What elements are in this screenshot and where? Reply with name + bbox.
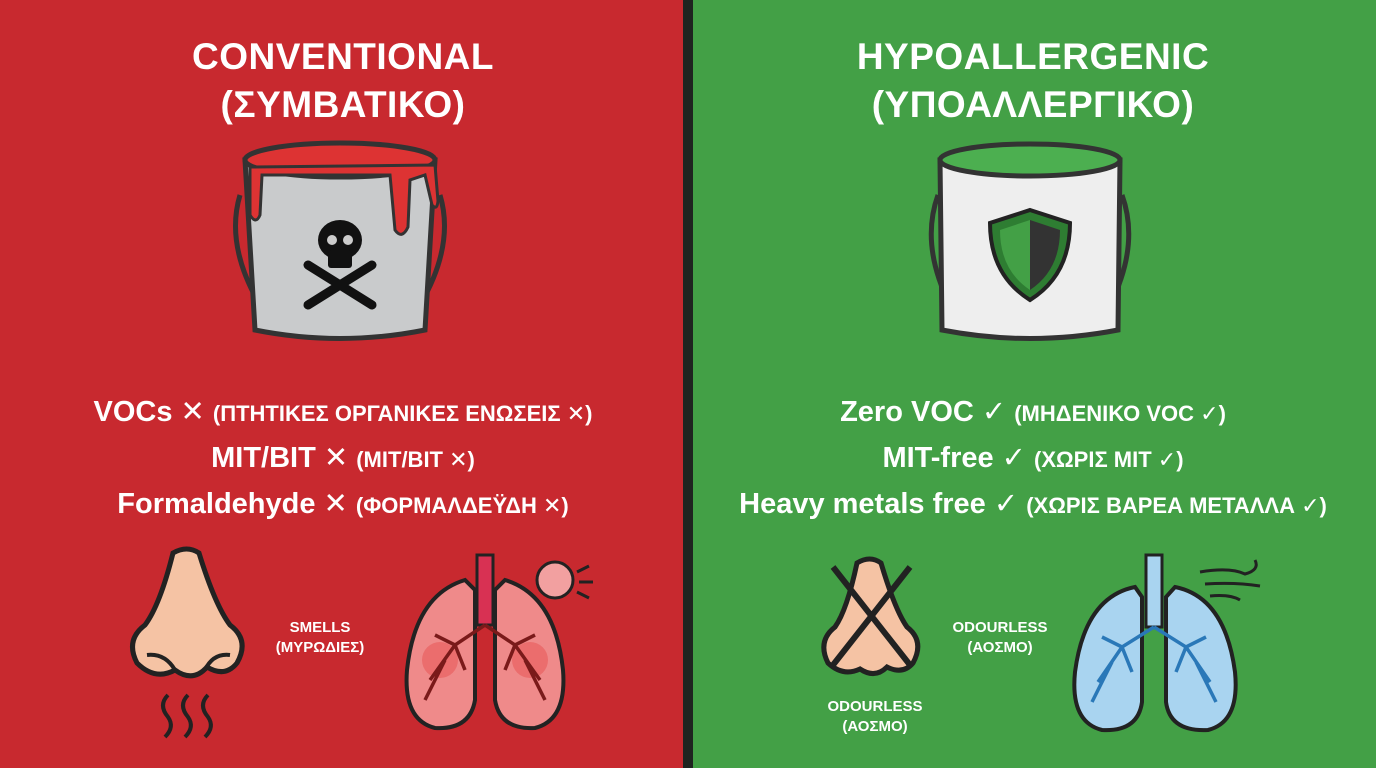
text block: hypoallergenic ingredients: Heavy metals free ✓ (ΧΩΡΙΣ ΒΑΡΕΑ ΜΕΤΑΛΛΑ ✓) xyxy=(739,488,1327,520)
text block: conventional ingredients xyxy=(94,396,592,520)
icon: toxic paint bucket xyxy=(233,140,447,341)
text block: hypoallergenic ingredients: MIT-free ✓ (ΧΩΡΙΣ ΜΙΤ ✓) xyxy=(882,442,1184,474)
label: smells: (ΜΥΡΩΔΙΕΣ) xyxy=(276,639,364,656)
label: odourless under nose xyxy=(827,698,922,735)
label: odourless middle: (ΑΟΣΜΟ) xyxy=(967,639,1033,656)
title: hypoallergenic xyxy=(857,36,1209,125)
divider xyxy=(683,0,693,768)
label: smells xyxy=(276,619,364,656)
panel: conventional xyxy=(0,0,683,768)
text block: hypoallergenic ingredients: Zero VOC ✓ (ΜΗΔΕΝΙΚΟ VOC ✓) xyxy=(840,396,1226,428)
text block: hypoallergenic ingredients xyxy=(739,396,1327,520)
icon: shield paint bucket xyxy=(928,142,1132,341)
text block: conventional ingredients: MIT/BIT ✕ (MIT/BIT ✕) xyxy=(211,442,475,474)
label: odourless under nose: ODOURLESS xyxy=(827,698,922,715)
text block: conventional ingredients: Formaldehyde ✕ (ΦΟΡΜΑΛΔΕΫΔΗ ✕) xyxy=(117,488,569,520)
label: odourless middle xyxy=(952,619,1048,656)
title: hypoallergenic: HYPOALLERGENIC xyxy=(857,36,1209,77)
panel: hypoallergenic xyxy=(693,0,1376,768)
text block: conventional ingredients: VOCs ✕ (ΠΤΗΤΙΚΕΣ ΟΡΓΑΝΙΚΕΣ ΕΝΩΣΕΙΣ ✕) xyxy=(94,396,592,428)
title: conventional: CONVENTIONAL xyxy=(192,36,494,77)
title: conventional: (ΣΥΜΒΑΤΙΚΟ) xyxy=(221,84,465,125)
icon: clean lungs xyxy=(1072,554,1260,732)
title: hypoallergenic: (ΥΠΟΑΛΛΕΡΓΙΚΟ) xyxy=(872,84,1194,125)
label: odourless under nose: (ΑΟΣΜΟ) xyxy=(842,718,908,735)
icon: crossed nose xyxy=(821,556,920,676)
icon: nose with smells xyxy=(130,546,245,738)
icon: irritated lungs xyxy=(404,554,593,730)
label: smells: SMELLS xyxy=(290,619,350,636)
title: conventional xyxy=(192,36,494,125)
label: odourless middle: ODOURLESS xyxy=(952,619,1048,636)
